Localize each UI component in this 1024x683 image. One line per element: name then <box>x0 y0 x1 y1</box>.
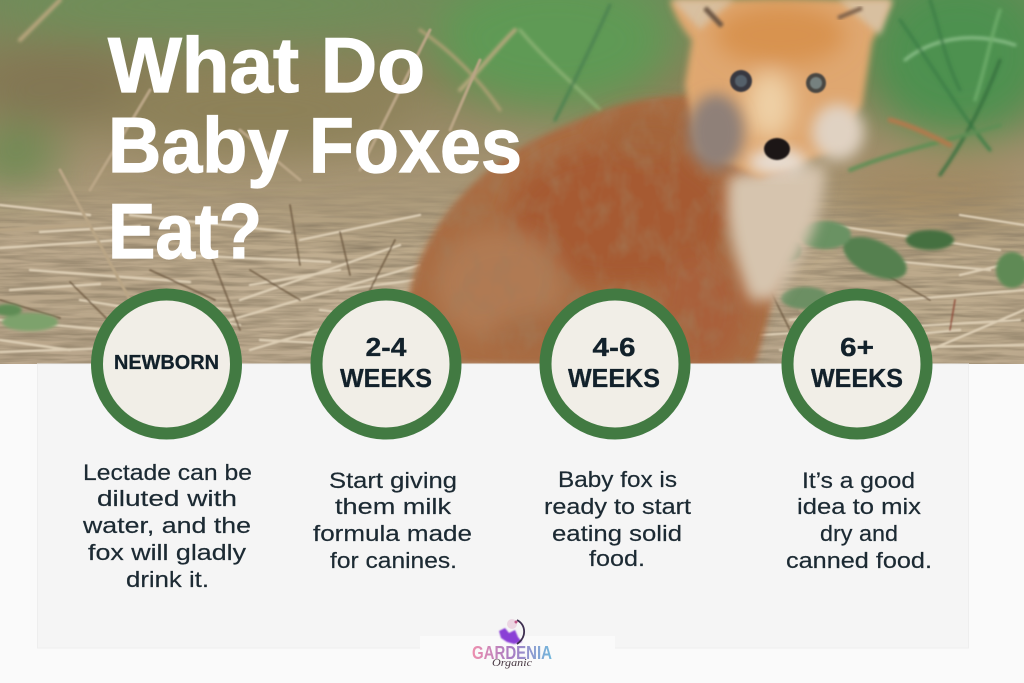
straw texture <box>0 190 1024 364</box>
badge: 4-6 weeks: WEEKS <box>568 363 660 393</box>
straw <box>0 30 1024 355</box>
icon: flower and moon <box>499 619 524 644</box>
chest <box>727 165 825 300</box>
badge: newborn: NEWBORN <box>114 352 219 374</box>
background grass <box>0 0 1024 320</box>
text: 6+ weeks feeding: idea to mix <box>797 494 921 519</box>
badge: 4-6 weeks <box>546 294 684 434</box>
lower panel background <box>0 364 1024 683</box>
badge: 6+ weeks: WEEKS <box>811 363 903 393</box>
ears <box>672 0 735 30</box>
text: 4-6 weeks feeding: eating solid <box>552 521 682 546</box>
content panel <box>38 364 968 648</box>
text: 2-4 weeks feeding: for canines. <box>330 548 457 573</box>
logo area backdrop <box>420 636 615 683</box>
fox head <box>670 0 892 178</box>
badge: newborn <box>97 294 236 434</box>
wordmark: GARDENIA <box>472 643 552 663</box>
stage: newborn <box>82 294 252 592</box>
text: 6+ weeks feeding <box>786 468 932 573</box>
title: What Do <box>108 21 425 109</box>
text: 2-4 weeks feeding: them milk <box>335 494 452 519</box>
badge: 6+ weeks: 6+ <box>840 332 874 362</box>
logo: Gardenia Organic <box>472 619 552 669</box>
badge: 2-4 weeks <box>316 294 456 434</box>
text: 4-6 weeks feeding: food. <box>589 546 645 571</box>
text: 2-4 weeks feeding <box>313 468 472 573</box>
small plants <box>0 221 1024 331</box>
badge: 2-4 weeks: WEEKS <box>340 363 432 393</box>
badge: 2-4 weeks: 2-4 <box>366 332 407 362</box>
fox body <box>400 90 825 365</box>
text: 4-6 weeks feeding: Baby fox is <box>558 467 677 492</box>
text: 4-6 weeks feeding: ready to start <box>544 494 691 519</box>
text: 6+ weeks feeding: It’s a good <box>802 468 915 493</box>
stage: 6+ weeks <box>786 294 932 573</box>
title <box>108 21 522 275</box>
text: newborn feeding: drink it. <box>126 567 209 592</box>
text: 6+ weeks feeding: canned food. <box>786 548 932 573</box>
badge: 6+ weeks <box>788 294 926 434</box>
stage: 4-6 weeks <box>544 294 691 571</box>
grass blades <box>20 0 1015 175</box>
text: newborn feeding: Lectade can be <box>83 460 252 485</box>
photo: fox cub on straw and grass <box>0 0 1024 365</box>
text: 2-4 weeks feeding: formula made <box>313 521 472 546</box>
text: newborn feeding: diluted with <box>97 486 237 511</box>
script: Organic: Organic <box>492 657 532 669</box>
text: newborn feeding <box>82 460 252 592</box>
text: 6+ weeks feeding: dry and <box>820 521 898 546</box>
title: Baby Foxes <box>108 101 522 189</box>
text: newborn feeding: water, and the <box>82 513 251 538</box>
badge: 4-6 weeks: 4-6 <box>592 332 636 362</box>
text: newborn feeding: fox will gladly <box>88 540 246 565</box>
text: 2-4 weeks feeding: Start giving <box>329 468 457 493</box>
eyes and nose <box>730 70 752 92</box>
text: 4-6 weeks feeding <box>544 467 691 571</box>
title: Eat? <box>108 187 262 275</box>
fur texture <box>452 102 734 340</box>
stage: 2-4 weeks <box>313 294 472 573</box>
